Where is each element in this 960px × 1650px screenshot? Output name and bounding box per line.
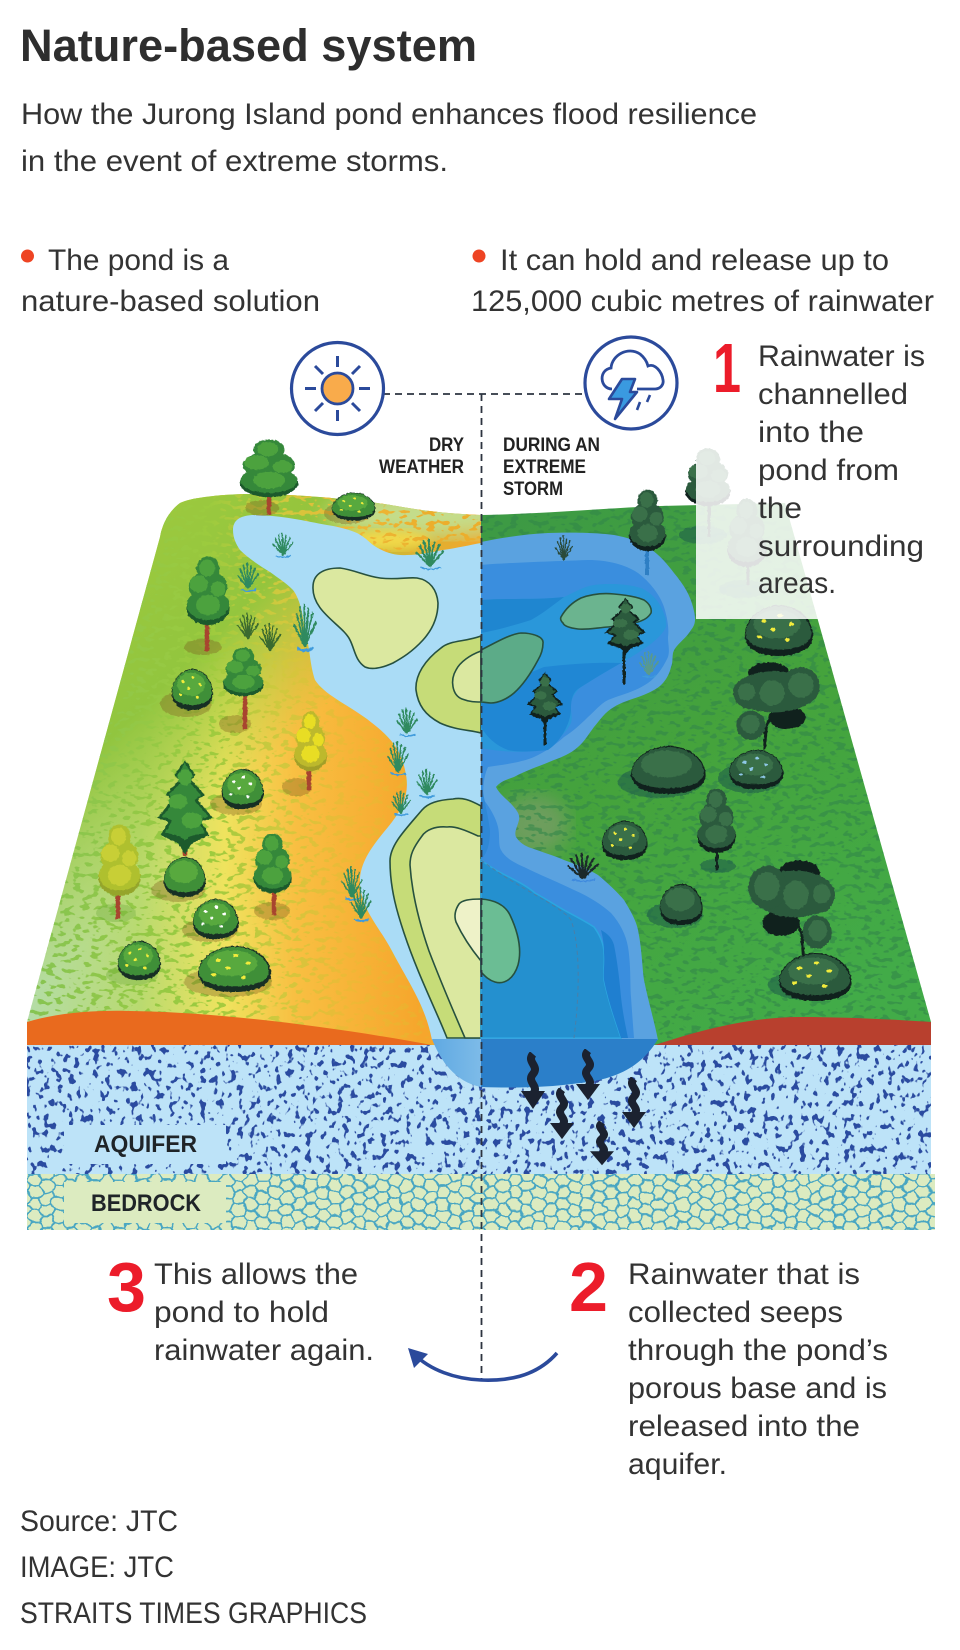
step 2: aquifer. (628, 1448, 727, 1481)
step 1: channelled (758, 378, 908, 411)
step 1: into the (758, 416, 864, 449)
flooded island middle (481, 633, 543, 703)
tree: left upper (184, 556, 230, 655)
bush: big dark (618, 746, 706, 798)
bush: big yellow flowers (184, 946, 272, 997)
bush: top (324, 493, 376, 524)
label: during an extreme storm: STORM (503, 478, 563, 500)
step 3: This allows the (154, 1258, 358, 1291)
label: dry weather: WEATHER (379, 456, 464, 478)
title: Nature-based system (20, 20, 477, 71)
flooded pond third water layer (481, 584, 666, 752)
bullet: capacity: It can hold and release up to (500, 244, 889, 277)
flooded pond deep band top (481, 597, 564, 633)
flooded pond deep band lower (481, 663, 621, 752)
bedrock label: BEDROCK (91, 1190, 202, 1217)
icon: sun (292, 342, 384, 434)
bullet: nature-based solution (21, 244, 320, 318)
island: dry lower (390, 798, 481, 1038)
bullet: nature-based solution: nature-based solution (21, 285, 320, 318)
step 1: areas. (758, 567, 836, 600)
bush: yellow flowers lower (106, 941, 161, 985)
oak: lower right (748, 860, 835, 959)
source and credits: IMAGE: JTC (20, 1551, 174, 1584)
bush: plain (151, 857, 206, 902)
yellow tree (282, 711, 327, 796)
tree: top left (240, 439, 298, 516)
step 3: pond to hold (154, 1296, 329, 1329)
label: during an extreme storm (503, 434, 600, 500)
bedrock label (64, 1182, 226, 1223)
flooded island top (561, 594, 651, 629)
step 3: rainwater again. (154, 1334, 374, 1367)
hidden tree behind panel, dark part (679, 448, 731, 544)
tree: left lower (253, 833, 292, 920)
flooded island lower (481, 899, 520, 983)
step 2: 2 (569, 1248, 608, 1326)
bush: dark small (602, 821, 648, 860)
bush: dark lower (647, 884, 703, 928)
dashed connector (383, 393, 585, 395)
label: during an extreme storm: EXTREME (503, 456, 586, 478)
bush: big dark yellow dots (768, 953, 852, 1001)
translucent panel behind step 1 (696, 330, 960, 619)
step 1: Rainwater is (758, 340, 925, 373)
label: dry weather: DRY (429, 434, 464, 456)
central dashed divider (480, 394, 482, 1380)
curved cycle arrow (408, 1348, 557, 1380)
bush: white flowers lower (182, 899, 239, 942)
flooded pond second water layer (481, 560, 669, 1038)
subtitle: How the Jurong Island pond enhances flood resilience (21, 98, 757, 131)
step 3: 3 (107, 1248, 146, 1326)
step 2: through the pond’s (628, 1334, 888, 1367)
island: dry middle (416, 636, 481, 733)
soil edge right (655, 1017, 931, 1045)
step 2: porous base and is (628, 1372, 887, 1405)
step 1: surrounding (758, 530, 924, 563)
label: during an extreme storm: DURING AN (503, 434, 600, 456)
bullet: capacity (471, 244, 934, 318)
label: dry weather (379, 434, 464, 478)
hidden tree behind panel (719, 498, 767, 598)
step 2: released into the (628, 1410, 860, 1443)
storm side land (481, 500, 941, 1050)
subtitle: in the event of extreme storms. (21, 145, 448, 178)
pine in flood lower (527, 672, 563, 745)
step 2: Rainwater that is (628, 1258, 860, 1291)
source and credits (20, 1505, 367, 1630)
bush: left upper (160, 669, 213, 717)
bush: under panel (745, 605, 813, 656)
tree: storm side middle (697, 788, 736, 873)
bedrock layer (19, 1166, 943, 1238)
plants (96, 439, 852, 1001)
pond in dry weather (233, 515, 481, 1040)
step 1: the (758, 492, 802, 525)
step 1: pond from (758, 454, 899, 487)
bullet: nature-based solution: The pond is a (48, 244, 230, 277)
reeds (238, 533, 659, 921)
seepage arrows (521, 1051, 646, 1165)
oak: upper right (733, 662, 820, 749)
aquifer label: AQUIFER (94, 1131, 197, 1158)
bush: white flowers upper (210, 769, 264, 815)
island: dry upper (313, 568, 438, 668)
pine in flood (605, 598, 646, 685)
flooded pond outer water (481, 533, 695, 1040)
subtitle (21, 98, 757, 178)
pond cross-section (432, 1039, 658, 1088)
step 1: 1 (713, 329, 741, 407)
soil edge left (27, 1011, 432, 1045)
flooded channel strip (481, 780, 490, 860)
dry side land (27, 494, 481, 1045)
tree: left second (219, 647, 264, 733)
terrain block: pond landscape (20, 490, 941, 1050)
bush: blue dots (718, 750, 783, 793)
flooded channel dark strip (601, 930, 628, 1038)
step 2: collected seeps (628, 1296, 843, 1329)
source and credits: Source: JTC (20, 1505, 178, 1538)
flooded channel base (481, 860, 621, 1038)
icon: storm (585, 337, 677, 429)
yellow-green tree (96, 825, 141, 922)
source and credits: STRAITS TIMES GRAPHICS (20, 1597, 367, 1630)
aquifer layer (27, 1045, 931, 1174)
step 3 (107, 1248, 374, 1367)
aquifer label (64, 1125, 226, 1164)
step 2 (569, 1248, 888, 1481)
pine: left (157, 760, 213, 856)
bullet: capacity: 125,000 cubic metres of rainwater (471, 285, 934, 318)
step 1 (713, 329, 925, 600)
pine: storm side top (629, 489, 666, 575)
